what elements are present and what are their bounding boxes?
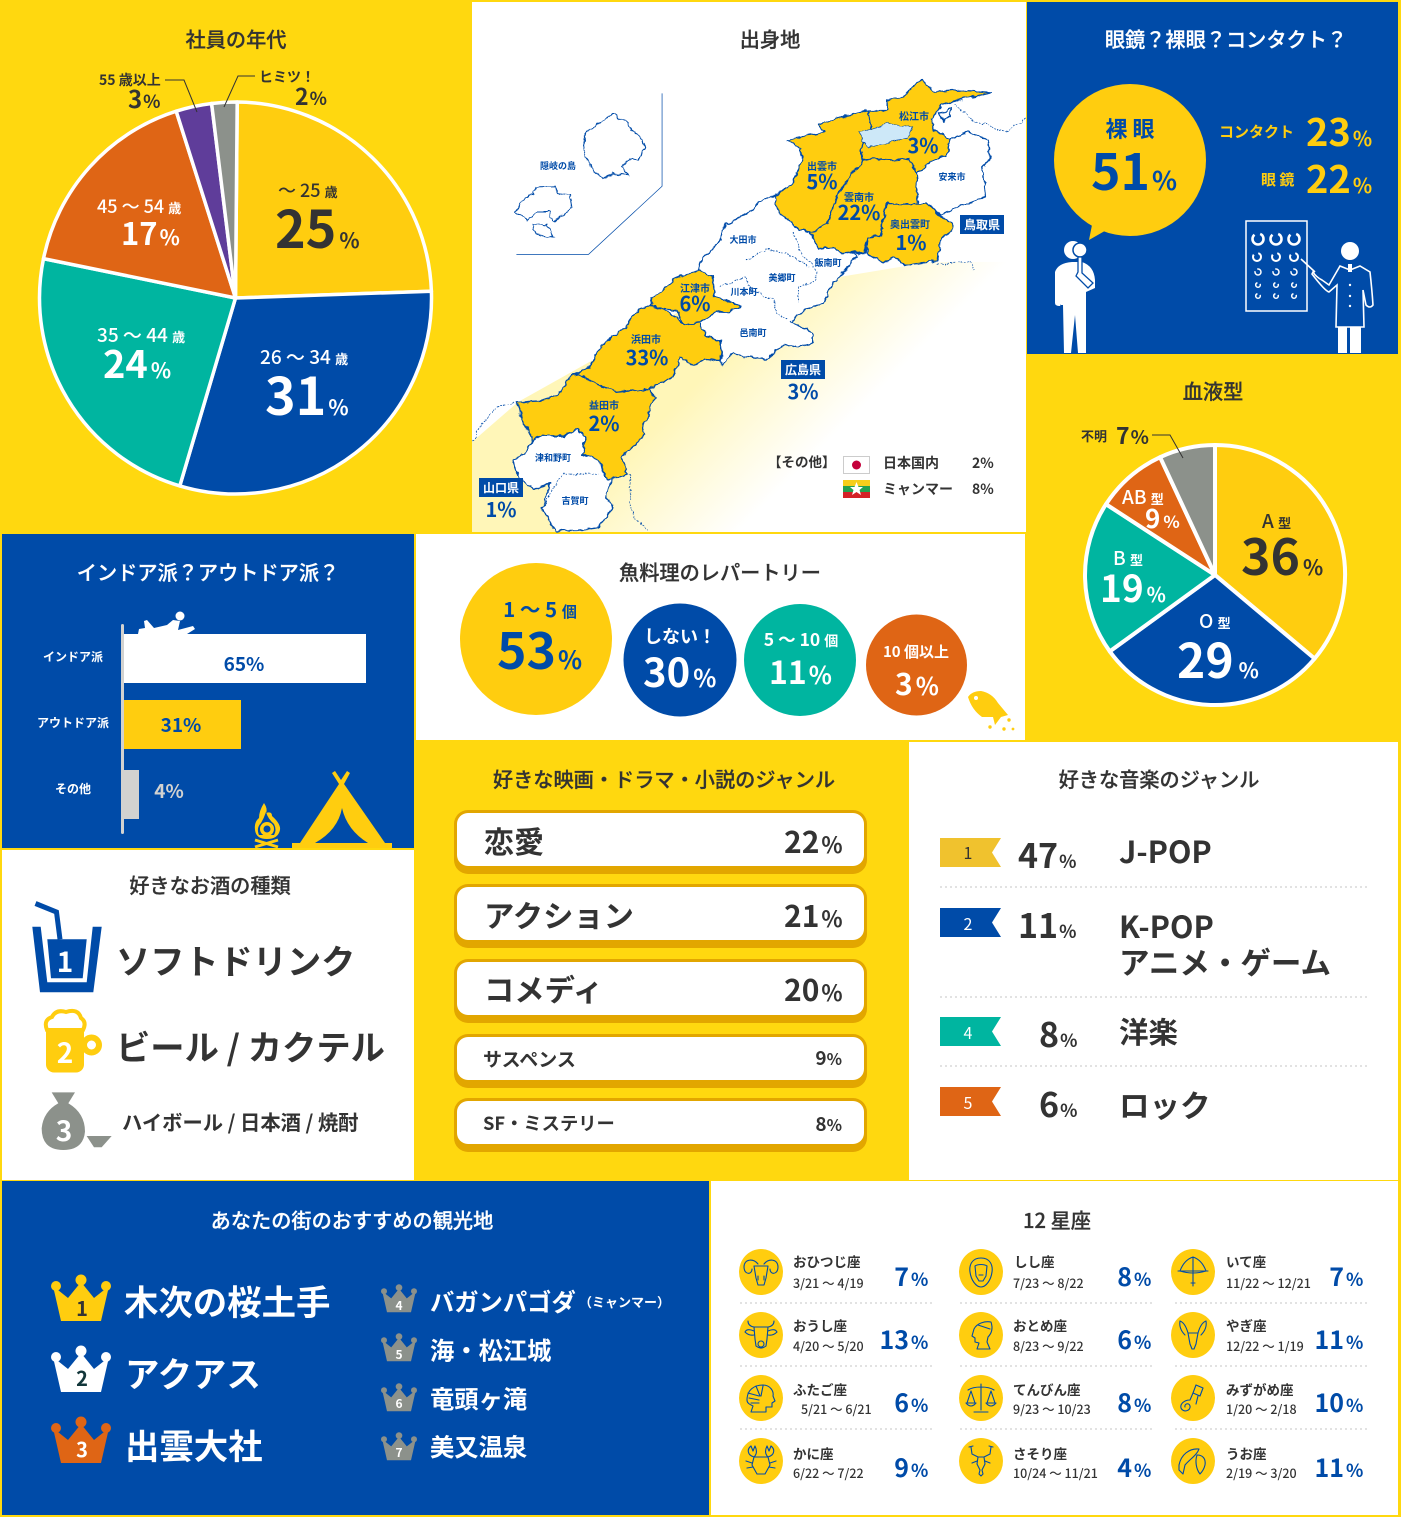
icon: fish xyxy=(968,691,1014,731)
label: 26 to 34: 26 ～ 34 歳 xyxy=(260,343,348,370)
map labels: 津和野町 xyxy=(535,451,571,464)
sign: Cancer: % xyxy=(911,1457,928,1483)
sign: Aquarius xyxy=(1171,1375,1363,1421)
heading: tourist spots: あなたの街のおすすめの観光地 xyxy=(211,1205,493,1234)
sign: Leo: 8 xyxy=(1117,1258,1132,1294)
sign: Leo: 7/23 ～ 8/22 xyxy=(1013,1273,1084,1292)
rank 4: western music: 洋楽 xyxy=(1119,1010,1178,1052)
leader line xyxy=(1152,435,1183,458)
bar chart xyxy=(37,624,366,834)
heading: music genres: 好きな音楽のジャンル xyxy=(1059,764,1259,793)
sign: Sagittarius: いて座 xyxy=(1226,1251,1267,1271)
sign: Taurus xyxy=(739,1312,928,1358)
sign: Libra: 8 xyxy=(1117,1384,1132,1420)
map labels: 江津市 xyxy=(680,280,710,295)
sign: Pisces: うお座 xyxy=(1226,1443,1267,1463)
rank 4: western music xyxy=(940,1008,1178,1057)
rank 4: western music: 8% xyxy=(1039,1008,1077,1057)
sign: Gemini: % xyxy=(911,1392,928,1418)
sign: Pisces: 2/19 ～ 3/20 xyxy=(1226,1463,1297,1482)
circle: 5-10 dishes xyxy=(744,604,856,716)
label: 55 and over xyxy=(99,70,161,115)
sign: Leo xyxy=(959,1249,1151,1295)
row: action xyxy=(454,884,867,948)
label: 45 to 54 xyxy=(97,193,181,254)
panel: music genres xyxy=(909,742,1398,1180)
rank 2: K-POP and anime: K-POP xyxy=(1119,903,1214,947)
label: 55 and over: 3% xyxy=(128,80,161,115)
map labels: 22% xyxy=(838,197,880,226)
rank 2: Aquas: 2 xyxy=(76,1363,88,1392)
label: type AB: 9% xyxy=(1145,499,1180,536)
sign: Taurus: 4/20 ～ 5/20 xyxy=(793,1336,864,1355)
row: action: 21% xyxy=(784,892,843,936)
sign: Sagittarius: 11/22 ～ 12/21 xyxy=(1226,1273,1311,1292)
sign: Taurus: % xyxy=(911,1329,928,1355)
sign: Aquarius: 1/20 ～ 2/18 xyxy=(1226,1399,1297,1418)
circle: 1-5 dishes xyxy=(460,563,612,715)
stat: glasses: 眼 鏡 xyxy=(1261,169,1294,190)
rank 4: Bagan pagoda: バガンパゴダ xyxy=(430,1283,576,1318)
rank 4: Bagan pagoda xyxy=(381,1283,670,1318)
rank 3: Izumo Taisha: 出雲大社 xyxy=(125,1419,263,1469)
map labels: 2% xyxy=(588,408,620,437)
label: secret xyxy=(259,67,327,112)
bar chart: インドア派 xyxy=(43,648,103,665)
sign: Scorpio: 10/24 ～ 11/21 xyxy=(1013,1463,1098,1482)
row: comedy xyxy=(454,959,867,1023)
sign: Aries: % xyxy=(911,1266,928,1292)
rank 2: beer and cocktail: ビール / カクテル xyxy=(116,1020,385,1070)
sign: Taurus: 13 xyxy=(879,1321,909,1357)
sign: Cancer xyxy=(739,1438,928,1485)
rank 1: J-POP: 47% xyxy=(1018,829,1076,878)
rank 5: sea and Matsue castle: 海・松江城 xyxy=(430,1332,551,1366)
label: Hiroshima: 3% xyxy=(787,376,819,405)
map labels: 美郷町 xyxy=(768,271,796,284)
sign: Capricorn: 12/22 ～ 1/19 xyxy=(1226,1336,1304,1355)
row: sci-fi and mystery: 8% xyxy=(815,1110,842,1137)
rank 5: rock: 6% xyxy=(1039,1078,1077,1127)
panel: eyewear xyxy=(1027,2,1398,354)
icon: patient xyxy=(1055,241,1095,353)
map labels: 33% xyxy=(626,342,668,371)
map labels: 浜田市 xyxy=(631,331,661,346)
rank 2: K-POP and anime: 11% xyxy=(1018,899,1076,948)
icon: tent xyxy=(292,771,392,848)
sign: Capricorn: やぎ座 xyxy=(1226,1315,1267,1335)
label: unknown: 不明 xyxy=(1081,426,1107,445)
label: 55 and over: 55 歳以上 xyxy=(99,70,161,90)
pie leader lines xyxy=(165,76,255,112)
rank 1: Kisuki cherry bank: 木次の桜土手 xyxy=(124,1275,330,1325)
pie chart: ages xyxy=(40,102,432,494)
rank 4: western music: 4 xyxy=(964,1020,973,1044)
sign: Scorpio: さそり座 xyxy=(1013,1443,1067,1463)
map labels: 出雲市 xyxy=(807,158,837,173)
sign: Aquarius: 10 xyxy=(1314,1384,1344,1420)
icon: eye chart xyxy=(1246,221,1307,311)
icon: doctor xyxy=(1301,242,1373,353)
sign: Capricorn: % xyxy=(1346,1329,1363,1355)
label: Tottori: 鳥取県 xyxy=(964,216,1000,233)
sign: Virgo: おとめ座 xyxy=(1013,1315,1067,1335)
map labels: 奥出雲町 xyxy=(890,216,930,231)
rank 5: rock: 5 xyxy=(964,1090,973,1114)
label: 35 to 44: 35 ～ 44 歳 xyxy=(97,321,185,348)
sign: Sagittarius xyxy=(1171,1249,1363,1295)
sign: Scorpio xyxy=(959,1438,1151,1485)
sign: Taurus: おうし座 xyxy=(793,1315,847,1335)
rank 1: soft drink xyxy=(32,904,355,992)
sign: Sagittarius: 7 xyxy=(1329,1258,1344,1294)
row: romance: 恋愛 xyxy=(484,818,544,862)
map labels: 邑南町 xyxy=(739,326,767,339)
map labels: 益田市 xyxy=(589,397,619,412)
label: 45 to 54: 45 ～ 54 歳 xyxy=(97,193,181,219)
rank 3: highball, sake, shochu: 3 xyxy=(56,1110,72,1150)
sign: Gemini: ふたご座 xyxy=(793,1379,847,1399)
label: type AB xyxy=(1122,483,1180,536)
panel: fish dishes xyxy=(416,534,1025,740)
sign: Cancer: 9 xyxy=(894,1449,909,1485)
heading: star signs: 12 星座 xyxy=(1023,1205,1091,1234)
label: type O: O 型 xyxy=(1199,607,1231,634)
row: sci-fi and mystery xyxy=(454,1098,867,1152)
rank 2: K-POP and anime: 2 xyxy=(964,911,973,935)
rank 6: Ryuzu falls: 6 xyxy=(395,1395,403,1412)
label: unknown: 7% xyxy=(1116,417,1149,451)
sign: Pisces xyxy=(1171,1438,1363,1485)
sign: Aries xyxy=(739,1249,928,1295)
rank 2: beer and cocktail xyxy=(46,1011,385,1072)
bar chart: 4% xyxy=(154,777,184,804)
sign: Libra: 9/23 ～ 10/23 xyxy=(1013,1399,1091,1418)
label: Yamaguchi: 1% xyxy=(485,494,517,523)
rank 4: Bagan pagoda: （ミャンマー） xyxy=(579,1292,670,1311)
map labels: 吉賀町 xyxy=(561,494,589,507)
row: comedy: コメディ xyxy=(484,966,603,1010)
rank 4: Bagan pagoda: 4 xyxy=(395,1297,403,1314)
circle: 5-10 dishes: 5 ～ 10 個 xyxy=(764,627,838,652)
heading: blood type: 血液型 xyxy=(1183,376,1243,405)
rank 3: highball, sake, shochu xyxy=(42,1092,359,1150)
rank 3: Izumo Taisha: 3 xyxy=(76,1434,88,1463)
circle: none: しない！ xyxy=(644,623,716,649)
bar chart: アウトドア派 xyxy=(37,714,109,731)
sign: Gemini: 6 xyxy=(894,1384,909,1420)
rank 2: K-POP and anime xyxy=(940,899,1331,983)
row: suspense: 9% xyxy=(815,1044,842,1071)
map labels xyxy=(535,108,966,507)
map labels: 5% xyxy=(806,166,838,195)
map labels: 飯南町 xyxy=(814,256,842,269)
label: 45 to 54: 17% xyxy=(121,209,180,254)
sign: Leo: % xyxy=(1134,1266,1151,1292)
circle: 10 or more xyxy=(866,614,967,716)
bar chart: 65% xyxy=(224,650,264,677)
label: Yamaguchi: 山口県 xyxy=(483,479,519,496)
panel: employee ages xyxy=(40,24,432,494)
sign: Capricorn xyxy=(1171,1312,1363,1358)
map labels: 隠岐の島 xyxy=(540,159,576,172)
rank 6: Ryuzu falls xyxy=(381,1380,527,1415)
rank 1: soft drink: 1 xyxy=(57,941,73,981)
panel: blood type xyxy=(1081,376,1345,705)
rank 2: K-POP and anime: アニメ・ゲーム xyxy=(1119,939,1331,983)
circle: 10 or more: 10 個以上 xyxy=(883,641,949,662)
pie chart: blood type xyxy=(1085,445,1345,705)
sign: Scorpio: 4 xyxy=(1117,1449,1132,1485)
circle: 5-10 dishes: 11% xyxy=(769,648,832,694)
rank 3: Izumo Taisha xyxy=(51,1416,263,1469)
label: unknown xyxy=(1081,417,1149,451)
rank 1: soft drink: ソフトドリンク xyxy=(116,934,355,984)
label: 26 to 34: 31% xyxy=(265,355,349,430)
legend: others: ミャンマー xyxy=(883,479,953,499)
heading: employee ages: 社員の年代 xyxy=(186,24,286,53)
label: Hiroshima xyxy=(781,360,825,405)
row: action: アクション xyxy=(484,892,634,936)
sign: Libra xyxy=(959,1375,1151,1421)
heading: fish dishes: 魚料理のレパートリー xyxy=(619,557,821,586)
heading: favourite drinks: 好きなお酒の種類 xyxy=(129,870,291,899)
label: type B: B 型 xyxy=(1113,544,1143,571)
sign: Aries: おひつじ座 xyxy=(793,1251,861,1271)
map labels: 雲南市 xyxy=(844,189,874,204)
sign: Libra: てんびん座 xyxy=(1013,1379,1081,1399)
rank 6: Ryuzu falls: 竜頭ヶ滝 xyxy=(430,1380,527,1415)
rank 5: rock xyxy=(940,1078,1210,1127)
circle: 1-5 dishes: 53% xyxy=(497,612,582,684)
panel: star signs xyxy=(711,1181,1398,1515)
bar chart: 31% xyxy=(161,711,201,738)
speech bubble: naked eye: 裸 眼 xyxy=(1106,112,1154,144)
label: Hiroshima: 広島県 xyxy=(785,361,821,378)
sign: Virgo: % xyxy=(1134,1329,1151,1355)
map labels: 松江市 xyxy=(899,108,929,123)
map labels: 6% xyxy=(679,288,711,317)
rank 7: Matagi hot spring: 7 xyxy=(395,1444,403,1461)
legend: others: 【その他】 xyxy=(768,451,836,471)
panel: favourite drinks xyxy=(2,850,414,1180)
label: type A: 36% xyxy=(1241,518,1323,590)
rank 7: Matagi hot spring xyxy=(381,1428,527,1463)
icon: campfire xyxy=(255,803,280,847)
sign: Scorpio: % xyxy=(1134,1457,1151,1483)
sign: Virgo: 6 xyxy=(1117,1321,1132,1357)
map labels: 3% xyxy=(907,130,939,159)
heading: eyewear: 眼鏡？裸眼？コンタクト？ xyxy=(1105,24,1347,53)
map labels: 大田市 xyxy=(729,233,757,246)
row: romance: 22% xyxy=(784,818,843,862)
legend: others: 8% xyxy=(972,479,994,499)
icon: person lying down xyxy=(138,612,195,634)
sign: Virgo xyxy=(959,1312,1151,1358)
label: type AB: AB 型 xyxy=(1122,483,1164,510)
panel: indoor or outdoor xyxy=(2,534,414,848)
sign: Capricorn: 11 xyxy=(1314,1321,1344,1357)
rank 1: Kisuki cherry bank: 1 xyxy=(76,1293,88,1322)
heading: birthplace: 出身地 xyxy=(740,24,800,53)
row: suspense xyxy=(454,1034,867,1088)
rank 2: beer and cocktail: 2 xyxy=(57,1032,73,1072)
rank 2: Aquas xyxy=(51,1346,261,1397)
map labels: 安来市 xyxy=(938,170,966,183)
label: up to 25: 25% xyxy=(275,188,360,263)
sign: Virgo: 8/23 ～ 9/22 xyxy=(1013,1336,1084,1355)
label: Yamaguchi xyxy=(479,478,523,523)
sign: Gemini: 5/21 ～ 6/21 xyxy=(801,1399,872,1418)
rank 5: sea and Matsue castle: 5 xyxy=(395,1346,403,1363)
sign: Libra: % xyxy=(1134,1392,1151,1418)
rank 5: rock: ロック xyxy=(1119,1082,1210,1126)
sign: Aries: 7 xyxy=(894,1258,909,1294)
sign: Leo: しし座 xyxy=(1014,1251,1055,1271)
map labels: 1% xyxy=(895,227,927,256)
sign: Pisces: 11 xyxy=(1314,1449,1344,1485)
sign: Aquarius: みずがめ座 xyxy=(1226,1379,1294,1399)
speech bubble: naked eye xyxy=(1054,84,1206,240)
rank 2: Aquas: アクアス xyxy=(125,1347,261,1397)
map labels: 川本町 xyxy=(730,285,758,298)
rank 3: highball, sake, shochu: ハイボール / 日本酒 / 焼酎 xyxy=(122,1106,359,1136)
heading: film genres: 好きな映画・ドラマ・小説のジャンル xyxy=(493,764,835,793)
sign: Aries: 3/21 ～ 4/19 xyxy=(793,1273,864,1292)
speech bubble: naked eye: 51% xyxy=(1091,133,1177,205)
stat: glasses: 22% xyxy=(1306,149,1372,204)
rank 1: J-POP: J-POP xyxy=(1119,828,1212,872)
label: type O: 29% xyxy=(1177,622,1259,692)
label: 35 to 44 xyxy=(97,321,185,389)
sign: Pisces: % xyxy=(1346,1457,1363,1483)
row: romance xyxy=(454,810,867,874)
sign: Cancer: 6/22 ～ 7/22 xyxy=(793,1463,864,1482)
sign: Gemini xyxy=(739,1375,928,1421)
stat: contact lenses: 23% xyxy=(1306,102,1372,157)
map: Shimane municipalities xyxy=(474,80,1025,531)
panel: birthplace map xyxy=(472,2,1026,532)
sign: Sagittarius: % xyxy=(1346,1266,1363,1292)
sign: Cancer: かに座 xyxy=(793,1443,834,1463)
label: type B: 19% xyxy=(1100,559,1166,613)
row: comedy: 20% xyxy=(784,966,843,1010)
circle: 1-5 dishes: 1 ～ 5 個 xyxy=(503,593,577,623)
bar chart: その他 xyxy=(55,780,91,797)
label: secret: ヒミツ！ xyxy=(259,67,315,87)
label: up to 25: ～ 25 歳 xyxy=(278,177,338,203)
icon: Oki islands xyxy=(516,113,644,237)
panel: tourist spots xyxy=(2,1181,709,1515)
background gradient: neighbouring land xyxy=(472,262,1026,532)
heading: indoor or outdoor: インドア派？アウトドア派？ xyxy=(77,557,339,586)
rank 1: J-POP xyxy=(940,828,1212,878)
rank 1: J-POP: 1 xyxy=(964,840,972,864)
label: type A: A 型 xyxy=(1262,507,1291,534)
legend: others: 日本国内 xyxy=(883,453,939,473)
stat: glasses xyxy=(1261,149,1372,204)
panel: film and drama genres xyxy=(454,764,867,1152)
sign: Aquarius: % xyxy=(1346,1392,1363,1418)
rank 7: Matagi hot spring: 美又温泉 xyxy=(430,1428,527,1463)
label: secret: 2% xyxy=(295,78,327,112)
circle: 10 or more: 3% xyxy=(895,660,939,704)
circle: none: 30% xyxy=(643,641,716,699)
label: 35 to 44: 24% xyxy=(103,334,171,389)
circle: none xyxy=(624,604,736,716)
legend: others xyxy=(768,451,994,499)
row: suspense: サスペンス xyxy=(483,1045,576,1072)
legend: others: 2% xyxy=(972,453,994,473)
row: sci-fi and mystery: SF・ミステリー xyxy=(483,1110,615,1136)
stat: contact lenses xyxy=(1219,102,1372,157)
stat: contact lenses: コンタクト xyxy=(1219,121,1294,142)
